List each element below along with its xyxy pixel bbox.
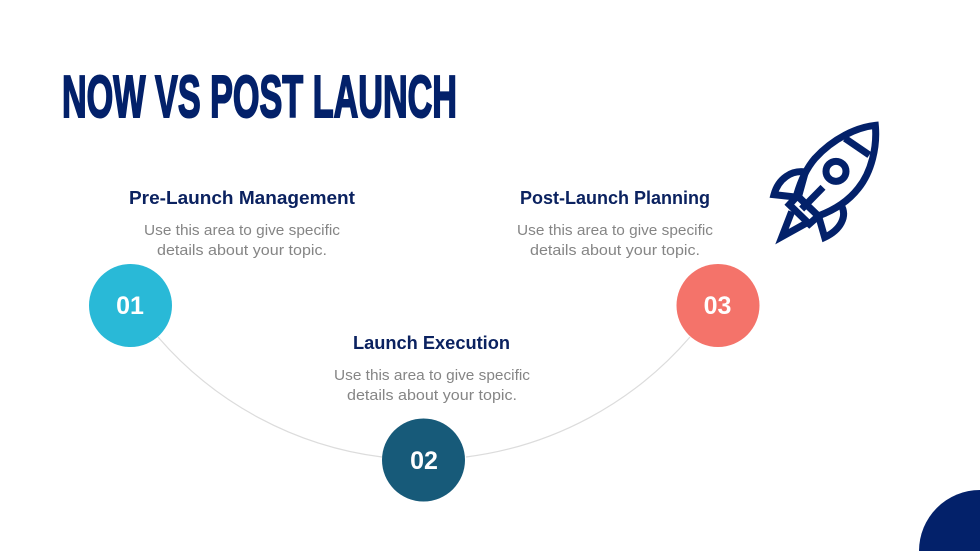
description — [334, 367, 531, 404]
description: details about your topic. — [347, 387, 517, 404]
heading: Launch Execution — [353, 332, 510, 353]
step 3: post-launch planning — [517, 187, 760, 347]
icon: rocket — [774, 125, 876, 237]
number badge 02 — [382, 418, 465, 502]
number badge 01 — [89, 264, 172, 347]
number badge 03 — [676, 264, 760, 347]
step 2: launch execution — [334, 332, 531, 502]
heading: Post-Launch Planning — [520, 187, 710, 208]
description: Use this area to give specific — [517, 222, 714, 239]
number badge 01: 01 — [116, 292, 144, 320]
description — [517, 222, 714, 259]
corner quarter circle — [919, 490, 980, 551]
step 1: pre-launch management — [89, 187, 355, 347]
number badge 02: 02 — [410, 447, 438, 475]
description — [144, 222, 341, 259]
description: details about your topic. — [157, 242, 327, 259]
description: details about your topic. — [530, 242, 700, 259]
heading: Pre-Launch Management — [129, 187, 355, 208]
title: NOW VS POST LAUNCH — [62, 64, 457, 130]
number badge 03: 03 — [704, 292, 731, 320]
connecting arc — [158, 337, 690, 457]
description: Use this area to give specific — [144, 222, 341, 239]
description: Use this area to give specific — [334, 367, 531, 384]
